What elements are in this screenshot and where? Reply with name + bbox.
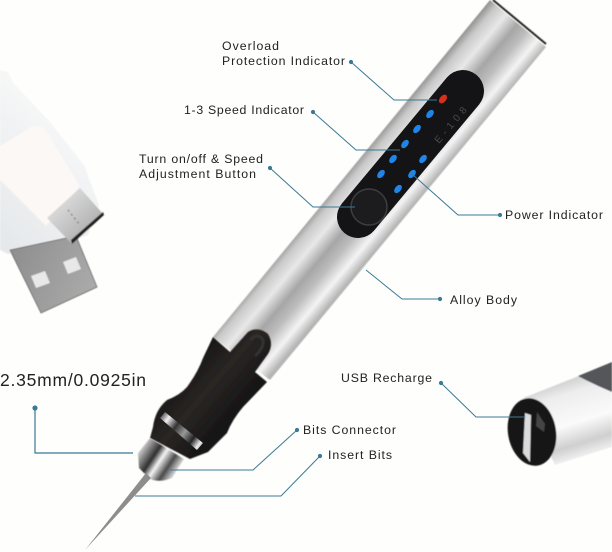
Type-C plug [47,188,104,244]
leader: bits connector [170,428,299,470]
leader: alloy body [366,270,442,301]
model mark: E-108 [433,105,470,146]
red overload LED [437,93,449,105]
USB recharge end [502,362,612,470]
label: button: Adjustment Button [139,167,256,181]
label: speed indicator: 1-3 Speed Indicator [184,103,304,117]
silver band [160,412,203,450]
leader: USB recharge [439,381,525,417]
speed LEDs [376,108,435,180]
label: overload protection indicator: Protection Indicator [222,54,345,68]
label: button: Turn on/off & Speed [139,152,263,166]
control panel [351,91,470,225]
chrome chuck [138,438,184,481]
leader: speed indicator [311,110,400,150]
leader: button [268,166,355,207]
label: insert bits: Insert Bits [328,448,392,462]
power button [351,189,387,225]
icon: USB cable [0,70,104,313]
insert bit [85,473,151,550]
label: power indicator: Power Indicator [505,208,603,222]
label: overload protection indicator: Overload [222,39,279,53]
leader: insert bits [135,454,322,496]
label: alloy body: Alloy Body [450,293,518,307]
label: USB recharge: USB Recharge [341,371,432,385]
pen body [213,0,546,380]
label: diameter: 2.35mm/0.0925in [0,370,146,390]
leader: overload protection [349,60,437,100]
charging port [523,413,531,462]
leader: power indicator [412,174,502,217]
black grip [150,329,271,459]
leader: diameter [33,406,133,453]
label: bits connector: Bits Connector [303,423,396,437]
power LEDs [393,153,428,195]
USB-A plug [10,236,97,313]
